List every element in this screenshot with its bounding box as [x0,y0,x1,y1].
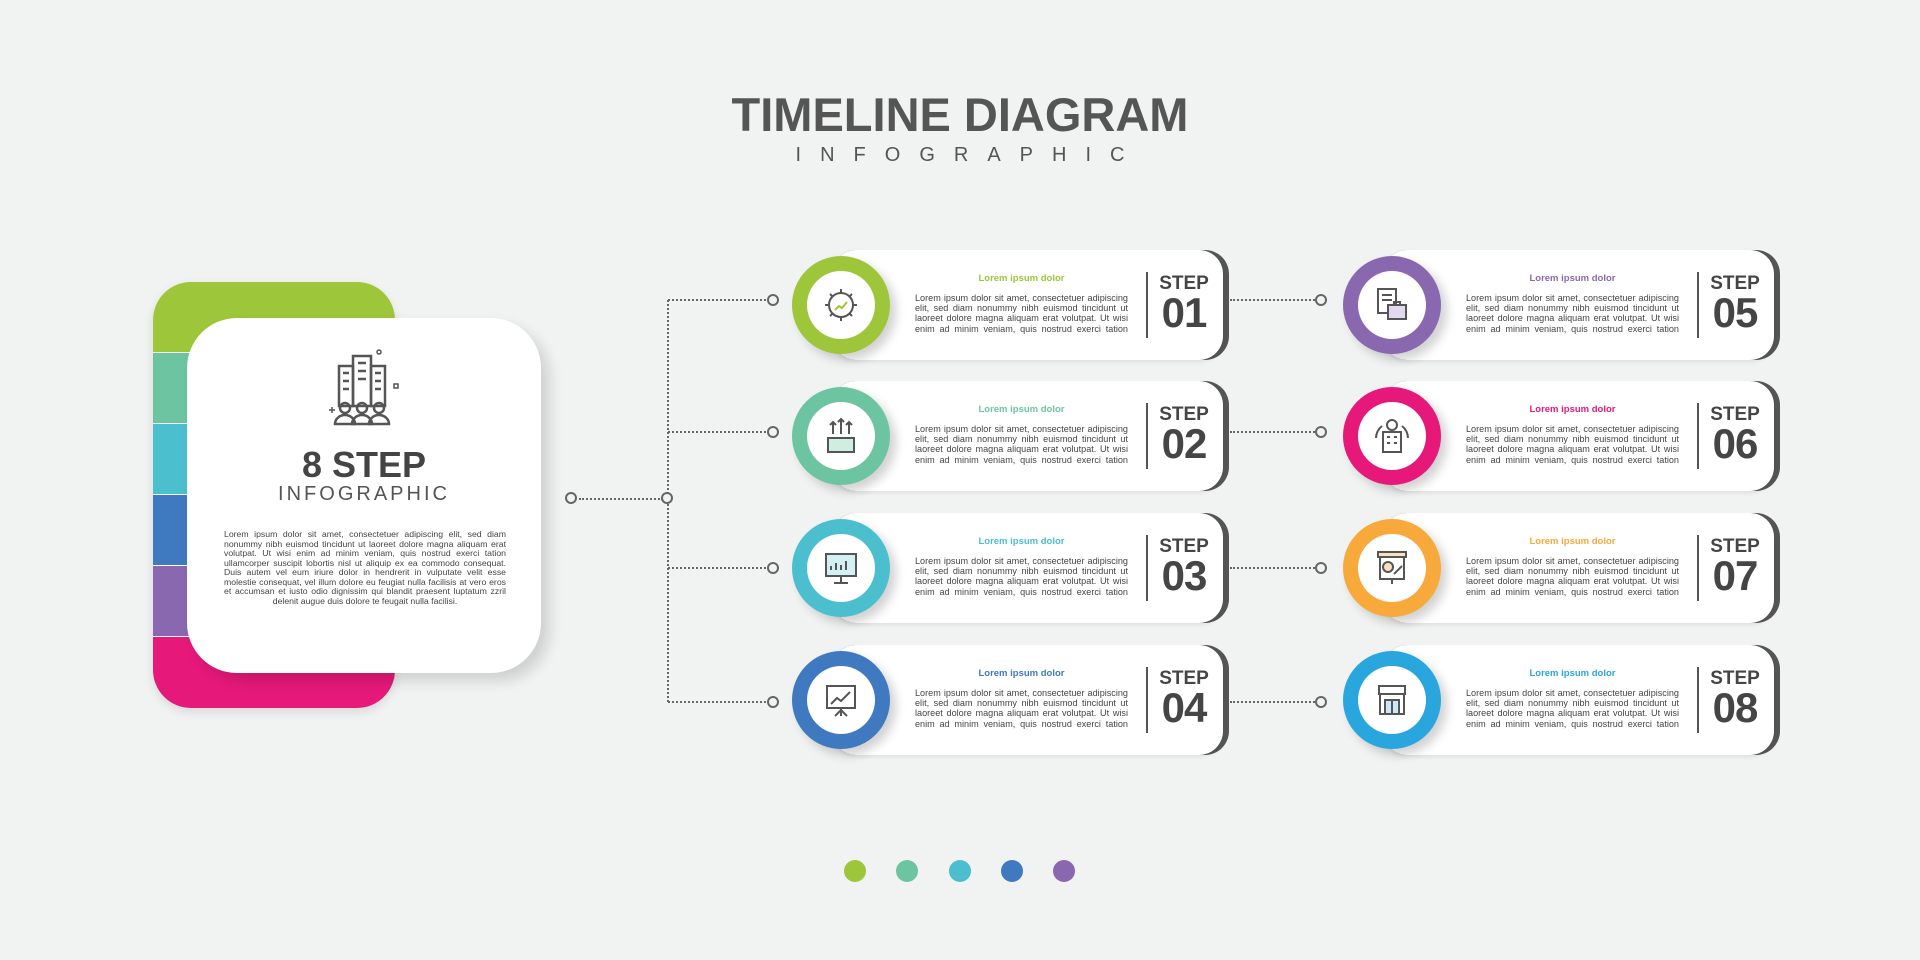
heading: 8 step: 8 STEP [302,444,426,485]
color dots legend [844,860,1075,882]
panel: step 04 [792,645,1229,760]
panel: left colored stripes [153,282,395,708]
panel: step 07 [1343,513,1780,628]
panel: step 02: 02 [1162,420,1206,467]
panel: step 08: STEP [1710,668,1760,689]
icon: store [1343,651,1441,749]
icon: growth briefcase [792,387,890,485]
icon: gear chart [792,256,890,354]
panel: step 06 [1343,381,1780,496]
icon: buildings and people [329,349,399,426]
text block: delenit augue duis dolore te feugait nulla facilisi. [273,596,457,606]
panel: step 07: Lorem ipsum dolor [1529,536,1616,547]
panel: step 03: Lorem ipsum dolor sit amet, consectetuer adipiscing elit, sed diam nonummy nibh euismod tincidunt ut laoreet dolore magna aliquam erat volutpat. Ut wisi enim ad minim veniam, quis nostrud exerci tation [915,556,1128,597]
panel: step 01 [792,250,1229,364]
panel: step 06: 06 [1713,420,1757,467]
icon: monitor chart [792,519,890,617]
icon: presentation board [792,651,890,749]
panel: step 02: Lorem ipsum dolor sit amet, consectetuer adipiscing elit, sed diam nonummy nibh euismod tincidunt ut laoreet dolore magna aliquam erat volutpat. Ut wisi enim ad minim veniam, quis nostrud exerci tation [915,424,1128,465]
icon: bank building [1343,387,1441,485]
panel: step 07: 07 [1713,552,1757,599]
panel: step 08 [1343,645,1780,760]
panel: step 01: Lorem ipsum dolor [978,273,1065,284]
panel: step 08: Lorem ipsum dolor [1529,668,1616,679]
panel: step 02 [792,381,1229,496]
panel: step 07: Lorem ipsum dolor sit amet, consectetuer adipiscing elit, sed diam nonummy nibh euismod tincidunt ut laoreet dolore magna aliquam erat volutpat. Ut wisi enim ad minim veniam, quis nostrud exerci tation [1466,556,1679,597]
panel: step 05: STEP [1710,273,1760,294]
panel: step 01: Lorem ipsum dolor sit amet, consectetuer adipiscing elit, sed diam nonummy nibh euismod tincidunt ut laoreet dolore magna aliquam erat volutpat. Ut wisi enim ad minim veniam, quis nostrud exerci tation [915,293,1128,334]
title: INFOGRAPHIC [796,144,1143,166]
panel: step 02: Lorem ipsum dolor [978,404,1065,415]
text block: Lorem ipsum dolor sit amet, consectetuer adipiscing elit, sed diam nonummy nibh euismod tincidunt ut laoreet dolore magna aliquam erat volutpat. Ut wisi enim ad minim veniam, quis nostrud exerci tation ullamcorper suscipit lobortis nisl ut aliquip ex ea commodo consequat. Duis autem vel eum iriure dolor in hendrerit in vulputate velit esse molestie consequat, vel illum dolore eu feugiat nulla facilisis at vero eros et accumsan et iusto odio dignissim qui blandit praesent luptatum zzril [224,529,506,596]
subheading: INFOGRAPHIC [278,483,450,505]
panel: step 04: Lorem ipsum dolor sit amet, consectetuer adipiscing elit, sed diam nonummy nibh euismod tincidunt ut laoreet dolore magna aliquam erat volutpat. Ut wisi enim ad minim veniam, quis nostrud exerci tation [915,688,1128,729]
panel: step 05: Lorem ipsum dolor [1529,273,1616,284]
panel: step 02: STEP [1159,404,1209,425]
panel: step 03: 03 [1162,552,1206,599]
panel: step 05: 05 [1713,289,1757,336]
panel: step 04: Lorem ipsum dolor [978,668,1065,679]
title: TIMELINE DIAGRAM [732,88,1188,141]
panel: step 08: 08 [1713,684,1757,731]
panel: step 05 [1343,250,1780,364]
icon: documents briefcase [1343,256,1441,354]
panel: main white card [187,318,541,673]
icon: dollar board [1343,519,1441,617]
title [732,88,1188,166]
panel: step 04: STEP [1159,668,1209,689]
panel: step 05: Lorem ipsum dolor sit amet, consectetuer adipiscing elit, sed diam nonummy nibh euismod tincidunt ut laoreet dolore magna aliquam erat volutpat. Ut wisi enim ad minim veniam, quis nostrud exerci tation [1466,293,1679,334]
panel: step 08: Lorem ipsum dolor sit amet, consectetuer adipiscing elit, sed diam nonummy nibh euismod tincidunt ut laoreet dolore magna aliquam erat volutpat. Ut wisi enim ad minim veniam, quis nostrud exerci tation [1466,688,1679,729]
panel: step 03: Lorem ipsum dolor [978,536,1065,547]
panel: step 06: Lorem ipsum dolor [1529,404,1616,415]
panel: step 03: STEP [1159,536,1209,557]
panel: step 01: 01 [1162,289,1206,336]
panel: step 06: STEP [1710,404,1760,425]
panel: step 04: 04 [1162,684,1206,731]
panel: step 06: Lorem ipsum dolor sit amet, consectetuer adipiscing elit, sed diam nonummy nibh euismod tincidunt ut laoreet dolore magna aliquam erat volutpat. Ut wisi enim ad minim veniam, quis nostrud exerci tation [1466,424,1679,465]
panel: step 03 [792,513,1229,628]
panel: step 01: STEP [1159,273,1209,294]
panel: step 07: STEP [1710,536,1760,557]
